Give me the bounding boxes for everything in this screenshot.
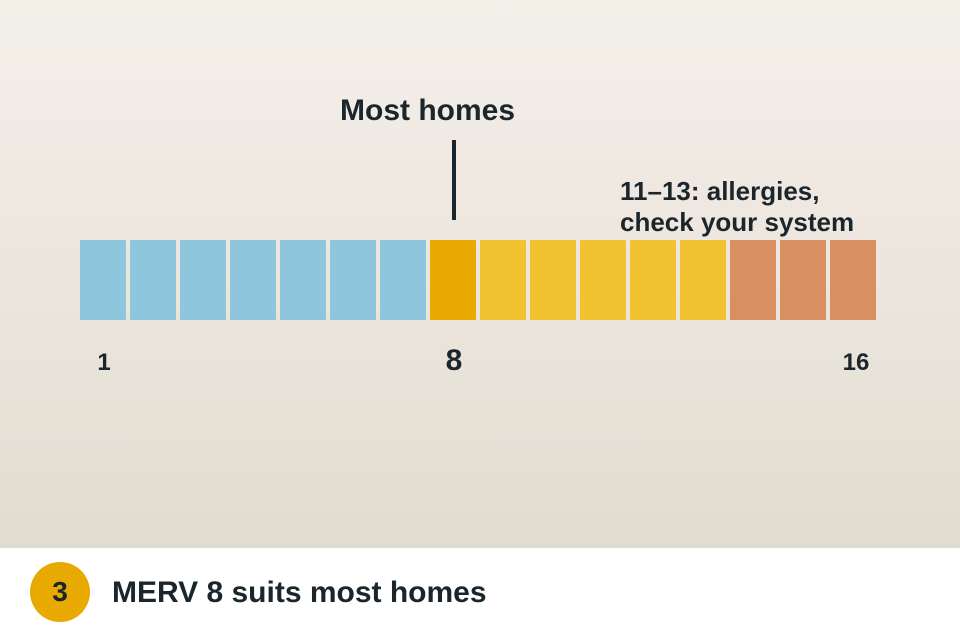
MERV rating scale bar [80,240,876,320]
scale label 1: 1 [97,349,111,376]
segment 12 [630,240,676,320]
segment 16 [830,240,876,320]
segment 1 [80,240,126,320]
segment 8 highlighted [430,240,476,320]
segment 4 [230,240,276,320]
footer bar [0,546,960,640]
segment 6 [330,240,376,320]
callout: allergies note: 11–13: allergies, [620,176,819,206]
segment 14 [730,240,776,320]
segment 10 [530,240,576,320]
segment 15 [780,240,826,320]
scale label 16: 16 [843,349,869,376]
step number badge: 3 [52,576,68,607]
segment 13 [680,240,726,320]
segment 2 [130,240,176,320]
segment 3 [180,240,226,320]
step number badge [30,562,90,622]
heading: most homes: Most homes [340,94,515,127]
callout: allergies note [620,176,854,237]
segment 11 [580,240,626,320]
segment 7 [380,240,426,320]
scale label 8: 8 [446,344,462,377]
pointer line to MERV 8 [452,140,456,220]
footer headline: MERV 8 suits most homes [112,576,487,609]
callout: allergies note: check your system [620,207,854,237]
segment 9 [480,240,526,320]
segment 5 [280,240,326,320]
